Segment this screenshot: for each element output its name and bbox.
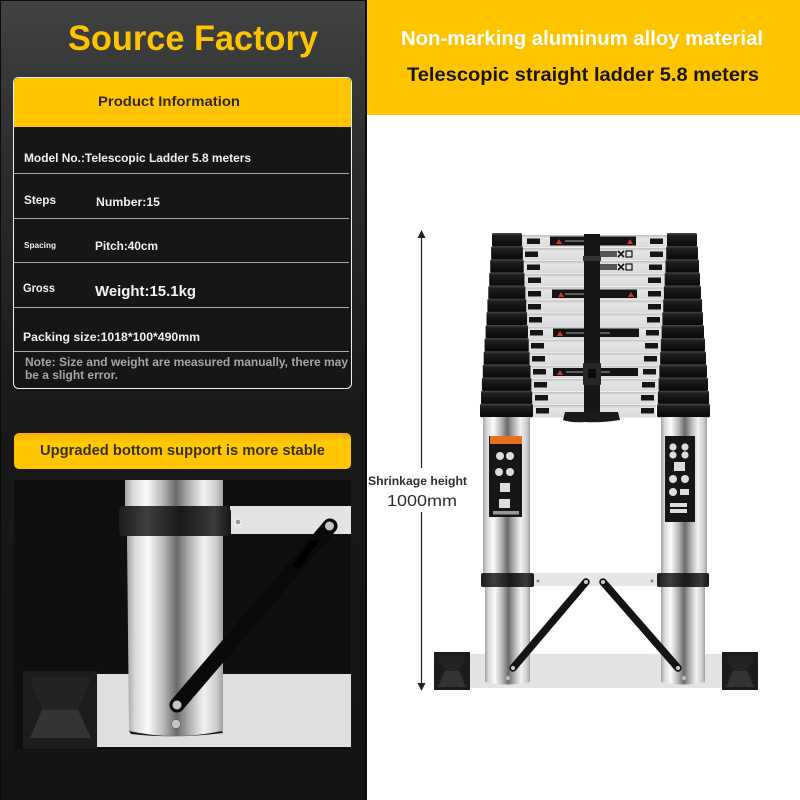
right rubber foot — [722, 652, 758, 690]
upper crossbar — [230, 506, 351, 534]
left lower tube — [483, 417, 530, 574]
carry handle — [563, 412, 620, 422]
note: be a slight error. — [25, 370, 118, 382]
lower screw — [172, 720, 180, 728]
header line: material: Non-marking aluminum alloy material — [401, 28, 763, 50]
table header band — [14, 78, 351, 127]
left telescopic tube sections — [480, 233, 533, 417]
shrinkage height label: Shrinkage height — [368, 476, 467, 488]
header line: product: Telescopic straight ladder 5.8 meters — [407, 65, 759, 86]
note: Note: Size and weight are measured manually, there may — [25, 357, 349, 369]
bottom crossbar — [470, 654, 722, 688]
banner: upgraded bottom support — [14, 433, 351, 469]
title: Source Factory — [68, 19, 319, 58]
note — [25, 357, 349, 382]
table heading: Product Information — [98, 93, 240, 109]
right telescopic tube sections — [657, 233, 710, 417]
row: steps label: Steps — [24, 193, 56, 207]
left clamp band — [481, 573, 534, 587]
ladder rungs — [522, 235, 668, 418]
row: model: Model No.:Telescopic Ladder 5.8 meters — [24, 151, 251, 165]
left rubber foot — [434, 652, 470, 690]
right folding brace — [601, 580, 686, 680]
rung slots — [525, 238, 663, 414]
right lower tube — [661, 417, 707, 574]
left dark panel background — [0, 0, 366, 800]
upper tube — [125, 480, 223, 510]
panel: product information table — [14, 78, 352, 388]
diagonal brace — [172, 522, 334, 710]
row: spacing label: Spacing — [24, 240, 56, 250]
row: packing size: Packing size:1018*100*490mm — [23, 330, 200, 344]
right white panel background — [366, 0, 800, 800]
row: steps value: Number:15 — [96, 195, 160, 209]
left safety sticker — [489, 436, 522, 517]
tube clamp band — [119, 506, 231, 536]
shrinkage height label: 1000mm — [387, 493, 457, 510]
row: weight value: Weight:15.1kg — [95, 284, 196, 300]
bottom crossbar — [96, 674, 351, 747]
row: spacing value: Pitch:40cm — [95, 239, 158, 253]
rubber foot — [23, 671, 97, 749]
ladder illustration — [434, 233, 758, 690]
panel: bottom support close-up — [14, 480, 351, 750]
right clamp band — [657, 573, 709, 587]
middle crossbar — [534, 573, 657, 586]
banner text: Upgraded bottom support is more stable — [40, 443, 325, 459]
rung warning stickers — [550, 236, 639, 376]
right yellow header band — [367, 0, 800, 115]
securing strap with buckles — [583, 234, 601, 412]
height dimension arrow — [418, 230, 426, 691]
shrinkage height label — [368, 476, 467, 510]
right safety sticker — [665, 436, 695, 522]
row: gross label: Gross — [23, 281, 55, 295]
lower tube — [127, 536, 223, 736]
left folding brace — [506, 580, 588, 680]
